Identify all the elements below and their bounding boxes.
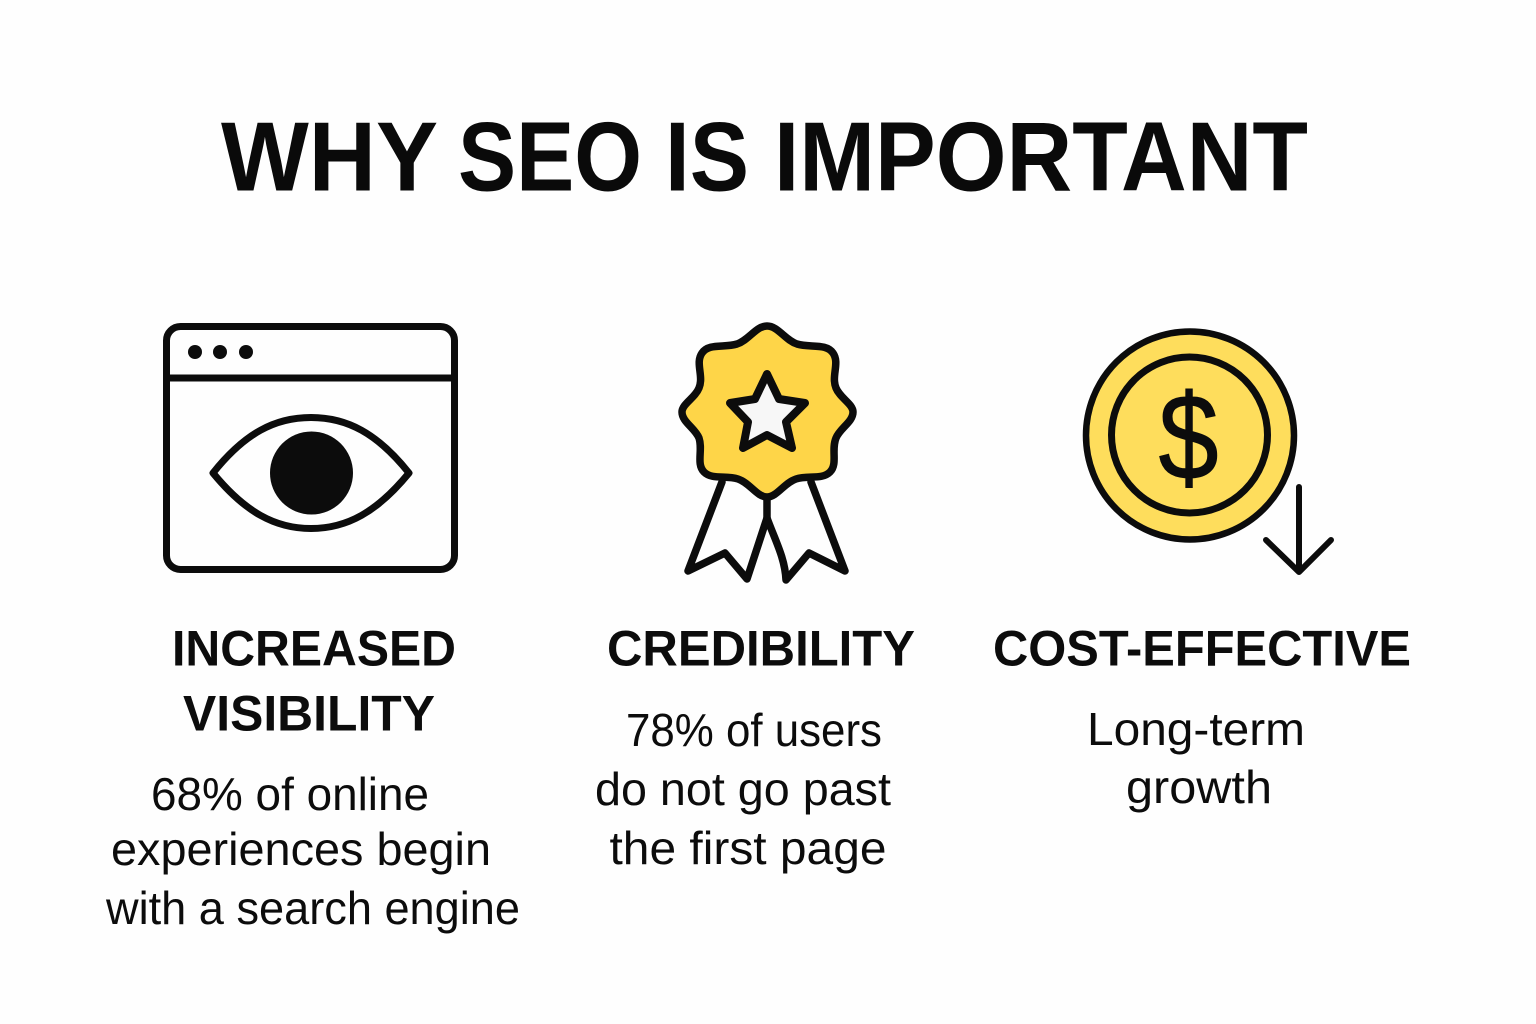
heading: cost-effective: COST-EFFECTIVE — [993, 620, 1411, 676]
panel: cost-effective — [993, 332, 1411, 813]
title: IMPORTANT — [774, 102, 1308, 212]
text: credibility statistic: 78% of users — [626, 704, 882, 756]
text: visibility statistic: 68% of online — [151, 768, 429, 820]
heading: credibility: CREDIBILITY — [607, 620, 915, 676]
text: visibility statistic: with a search engine — [105, 882, 520, 934]
title: IS — [665, 102, 749, 212]
text: cost-effective description: growth — [1126, 761, 1272, 813]
title: SEO — [458, 102, 642, 212]
text: credibility statistic: do not go past — [595, 763, 891, 815]
heading: increased visibility: INCREASED — [172, 620, 456, 676]
heading: increased visibility — [172, 620, 456, 742]
text: cost-effective description: Long-term — [1087, 703, 1305, 755]
text: visibility statistic: experiences begin — [111, 823, 491, 875]
title — [221, 102, 1308, 212]
icon: award ribbon badge — [682, 326, 853, 580]
text: credibility statistic: the first page — [610, 822, 886, 874]
panel: credibility — [595, 326, 915, 874]
icon: dollar coin with down arrow — [1086, 332, 1331, 572]
icon: dollar coin with down arrow: $ — [1158, 369, 1218, 505]
panel: increased visibility — [105, 326, 520, 934]
text: visibility statistic — [105, 768, 520, 934]
text: credibility statistic — [595, 704, 891, 874]
text: cost-effective description — [1087, 703, 1305, 813]
title: WHY — [221, 102, 438, 212]
icon: browser window with eye — [166, 326, 454, 570]
heading: increased visibility: VISIBILITY — [183, 686, 435, 742]
